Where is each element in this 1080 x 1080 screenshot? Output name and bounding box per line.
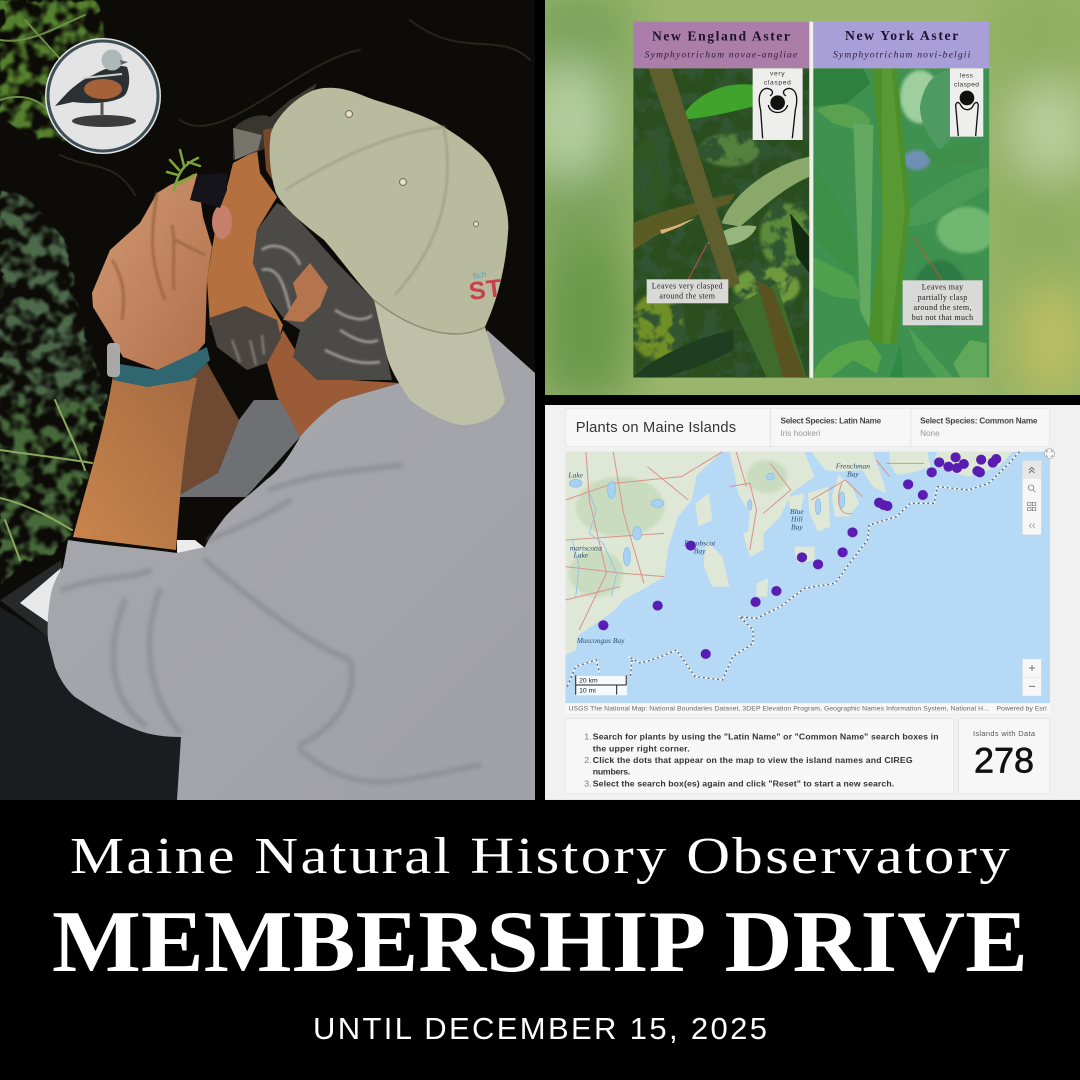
map header — [565, 408, 1049, 447]
baseball cap: ST — [467, 274, 504, 306]
map labels: Hill — [790, 515, 803, 524]
fleece sweater — [48, 330, 535, 800]
forest tint patches — [569, 460, 787, 597]
scale bar — [576, 675, 627, 695]
map labels: Lake — [567, 471, 584, 480]
callout: leaves very clasped: Leaves very clasped — [652, 282, 723, 291]
callout: leaves very clasped — [647, 279, 728, 303]
map attribution: Powered by Esri — [997, 706, 1047, 713]
map labels — [567, 462, 870, 645]
foliage behind the naturalist — [0, 0, 105, 585]
plant sprig — [167, 150, 200, 190]
duck illustration — [55, 50, 136, 127]
photo: partly clasped stem — [813, 68, 997, 378]
callout: partial clasp: around the stem, — [913, 303, 972, 312]
map labels: Lake — [573, 551, 589, 560]
instructions panel: 2. — [584, 755, 592, 765]
callout: partial clasp: Leaves may — [922, 283, 963, 292]
fullscreen icon — [1044, 449, 1055, 459]
rivers and lakes — [570, 473, 845, 597]
map labels: Frenchman — [835, 462, 870, 471]
map attribution — [565, 703, 1050, 713]
baseball cap — [270, 88, 508, 425]
callout: partial clasp: partially clasp — [918, 293, 968, 302]
instructions panel — [565, 719, 954, 793]
map tool buttons — [1022, 461, 1041, 535]
inset diagram: very clasped: clasped — [764, 80, 791, 87]
map labels: mariscotta — [570, 543, 602, 552]
foliage strokes — [0, 15, 530, 560]
logo badge: harlequin duck — [45, 38, 161, 154]
inset diagram: very clasped — [753, 68, 803, 140]
instructions panel: Select the search box(es) again and click "Reset" to start a new search. — [593, 778, 894, 788]
map header: Select Species: Common Name — [920, 417, 1038, 426]
inset diagram: less clasped: clasped — [954, 82, 979, 89]
map labels: Muscongus Bay — [576, 636, 625, 645]
scale bar: 20 km — [579, 678, 598, 685]
map labels: Bay — [694, 547, 706, 556]
grey hair — [233, 83, 392, 380]
plant occurrence dots — [598, 452, 1001, 659]
maritime boundary dashed — [567, 452, 1019, 687]
instructions panel: Search for plants by using the "Latin Name" or "Common Name" search boxes in — [593, 732, 939, 742]
heading band: New England Aster: Symphyotrichum novae-angliae — [645, 49, 798, 60]
stat card: islands with data: 278 — [974, 741, 1034, 780]
heading band: New England Aster — [633, 22, 809, 68]
heading band: New York Aster — [813, 22, 989, 68]
beard — [209, 306, 281, 370]
instructions panel: Click the dots that appear on the map to view the island names and CIREG — [593, 755, 913, 765]
map labels: Bay — [791, 522, 803, 531]
raised hand holding a sprig — [92, 173, 212, 370]
map labels: Penobscot — [683, 539, 716, 548]
map labels: Bay — [847, 469, 859, 478]
photo: clasped stem — [630, 68, 813, 378]
inset diagram: less clasped — [950, 68, 983, 137]
far arm — [176, 363, 239, 497]
map header: None — [920, 429, 940, 438]
map attribution: USGS The National Map: National Boundaries Dataset, 3DEP Elevation Program, Geographic Names Information System, National H... — [569, 706, 989, 713]
heading band: New England Aster: New England Aster — [652, 29, 790, 44]
panel: New England Aster — [630, 22, 813, 378]
inset diagram: less clasped: less — [960, 73, 974, 80]
wrist watch band — [107, 343, 210, 387]
heading: Membership Drive: MEMBERSHIP DRIVE — [52, 894, 1028, 991]
aster comparison chart — [630, 22, 997, 378]
leather cap strap — [263, 128, 273, 180]
dark trousers — [0, 607, 185, 800]
instructions panel: 3. — [584, 778, 592, 788]
instructions panel: numbers. — [593, 767, 630, 777]
panel: Plants on Maine Islands web map — [545, 405, 1080, 800]
roads and boundaries — [565, 452, 924, 630]
stat card: islands with data — [959, 719, 1049, 793]
panel: aster comparison background — [530, 0, 1080, 405]
heading band: New York Aster: New York Aster — [845, 28, 958, 43]
divider between species — [809, 22, 813, 378]
neck — [267, 330, 400, 437]
far sleeve — [176, 400, 300, 497]
stat card: islands with data: Islands with Data — [973, 729, 1036, 738]
date line: UNTIL DECEMBER 15, 2025 — [313, 1011, 767, 1046]
callout: leaves very clasped: around the stem — [659, 292, 716, 301]
map of the Maine coast — [565, 452, 1050, 703]
hand lens — [190, 173, 227, 208]
map labels: Blue — [790, 507, 804, 516]
white tablet edge — [177, 540, 205, 553]
ear — [283, 263, 328, 322]
panel: New York Aster — [813, 22, 997, 378]
map header: Plants on Maine Islands — [576, 420, 736, 436]
face — [207, 150, 283, 345]
title: Maine Natural History Observatory: Maine Natural History Observatory — [70, 828, 1012, 885]
callout: partial clasp — [903, 280, 983, 325]
scale bar: 10 mi — [579, 687, 596, 694]
inset diagram: very clasped: very — [770, 71, 785, 78]
map header: Select Species: Latin Name — [780, 417, 882, 426]
map header: Iris hookeri — [780, 429, 821, 438]
baseball cap: Sch — [472, 270, 487, 281]
zoom buttons — [1022, 659, 1041, 696]
photo: naturalist examining a plant with a hand lens — [0, 0, 535, 800]
heading band: New York Aster: Symphyotrichum novi-belgii — [833, 49, 971, 60]
callout: partial clasp: but not that much — [912, 313, 974, 322]
tablet under the arm — [0, 560, 62, 637]
instructions panel: the upper right corner. — [593, 743, 690, 753]
land masses — [565, 452, 1013, 655]
near forearm — [73, 375, 197, 550]
instructions panel: 1. — [584, 732, 592, 742]
